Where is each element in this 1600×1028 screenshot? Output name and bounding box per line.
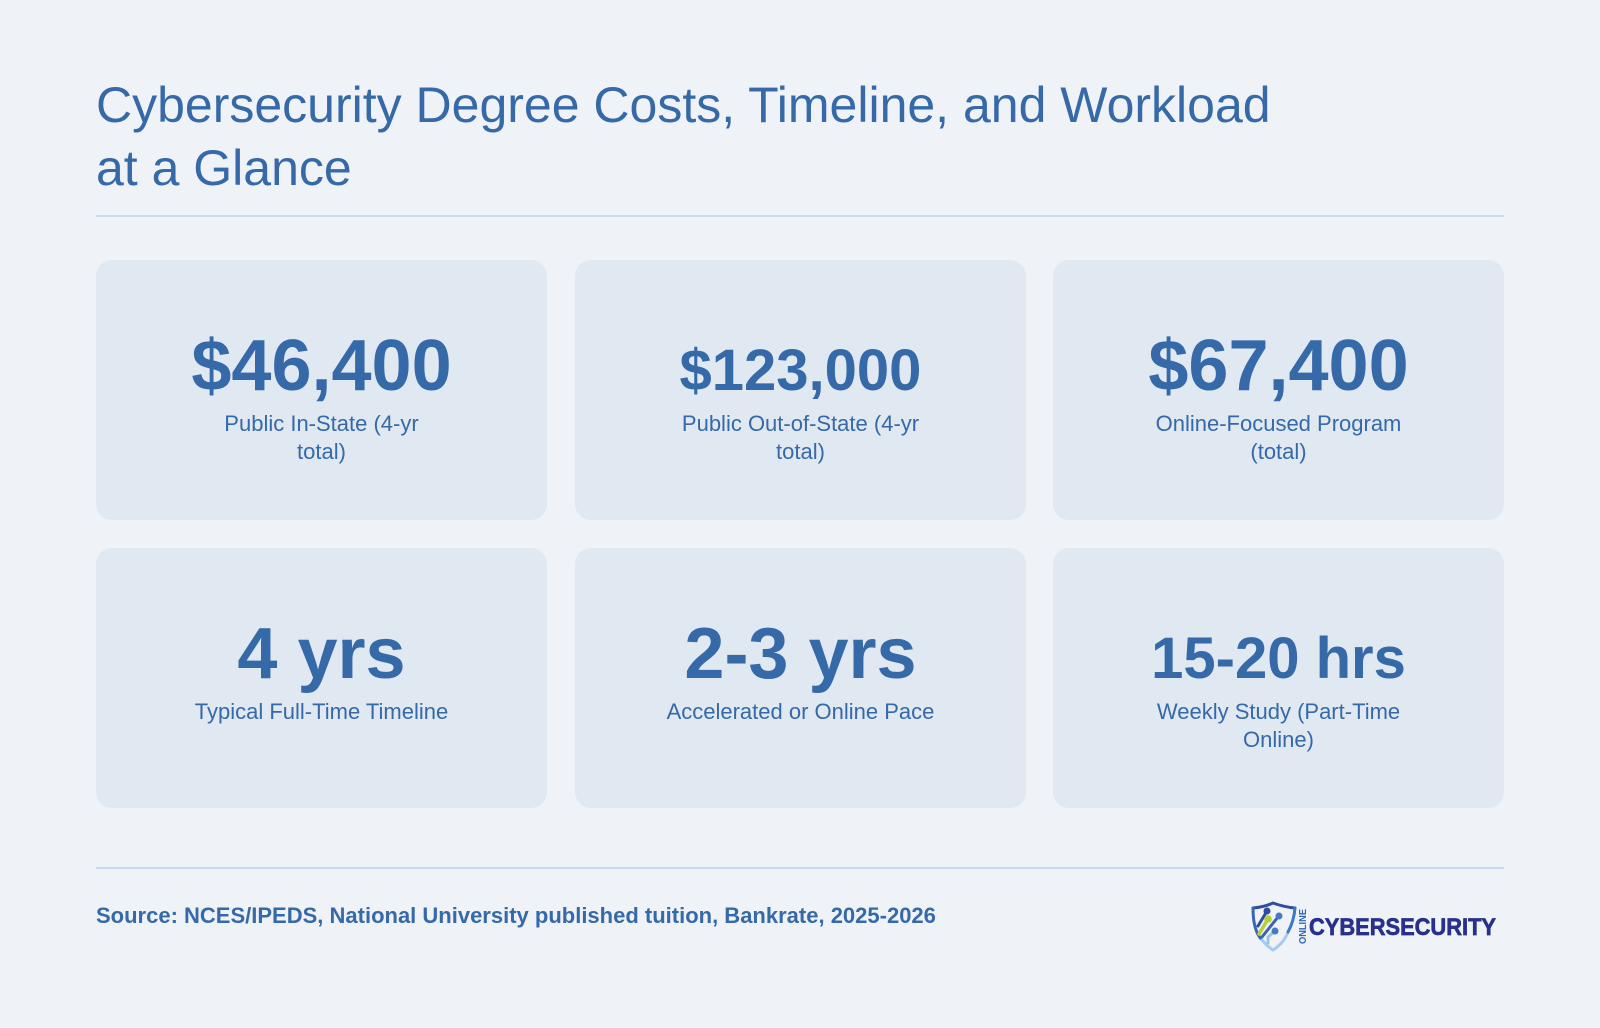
label: public in-state (224, 411, 419, 464)
label: public in-state: total) (297, 439, 346, 464)
title (96, 77, 1271, 196)
label: weekly study: Weekly Study (Part-Time (1157, 699, 1400, 724)
label: online-focused (1156, 411, 1401, 464)
stat: 15-20 hrs: 15-20 hrs (1151, 626, 1406, 691)
stat: 2-3 yrs: 2-3 yrs (684, 614, 917, 694)
wordmark: online: ONLINE (1298, 909, 1309, 944)
label: online-focused: (total) (1250, 439, 1307, 464)
label: public out-of-state (682, 411, 919, 464)
panel: online-focused program cost (1053, 260, 1504, 520)
label: public out-of-state: Public Out-of-State (4-yr (682, 411, 919, 436)
stat: $123,000: $123,000 (680, 338, 921, 403)
logo: Online Cybersecurity (1252, 902, 1496, 952)
title: Cybersecurity Degree Costs, Timeline, and Workload (96, 77, 1271, 133)
panel: accelerated timeline (575, 548, 1026, 808)
stat: $46,400: $46,400 (191, 326, 452, 406)
label: full-time timeline: Typical Full-Time Timeline (195, 699, 448, 724)
label: online-focused: Online-Focused Program (1156, 411, 1401, 436)
label: public in-state: Public In-State (4-yr (224, 411, 419, 436)
wordmark: cybersecurity: CYBERSECURITY (1309, 914, 1496, 941)
panel: public in-state cost (96, 260, 547, 520)
stat: $67,400: $67,400 (1148, 326, 1409, 406)
label: public out-of-state: total) (776, 439, 825, 464)
label: weekly study: Online) (1243, 727, 1314, 752)
panel: full-time timeline (96, 548, 547, 808)
panel: public out-of-state cost (575, 260, 1026, 520)
stat: 4 yrs: 4 yrs (237, 614, 406, 694)
panel: weekly study workload (1053, 548, 1504, 808)
source note: Source: NCES/IPEDS, National University published tuition, Bankrate, 2025-2026 (96, 903, 936, 928)
icon: shield (1253, 903, 1295, 950)
label: weekly study (1157, 699, 1400, 752)
title: at a Glance (96, 140, 352, 196)
label: accelerated pace: Accelerated or Online Pace (667, 699, 934, 724)
